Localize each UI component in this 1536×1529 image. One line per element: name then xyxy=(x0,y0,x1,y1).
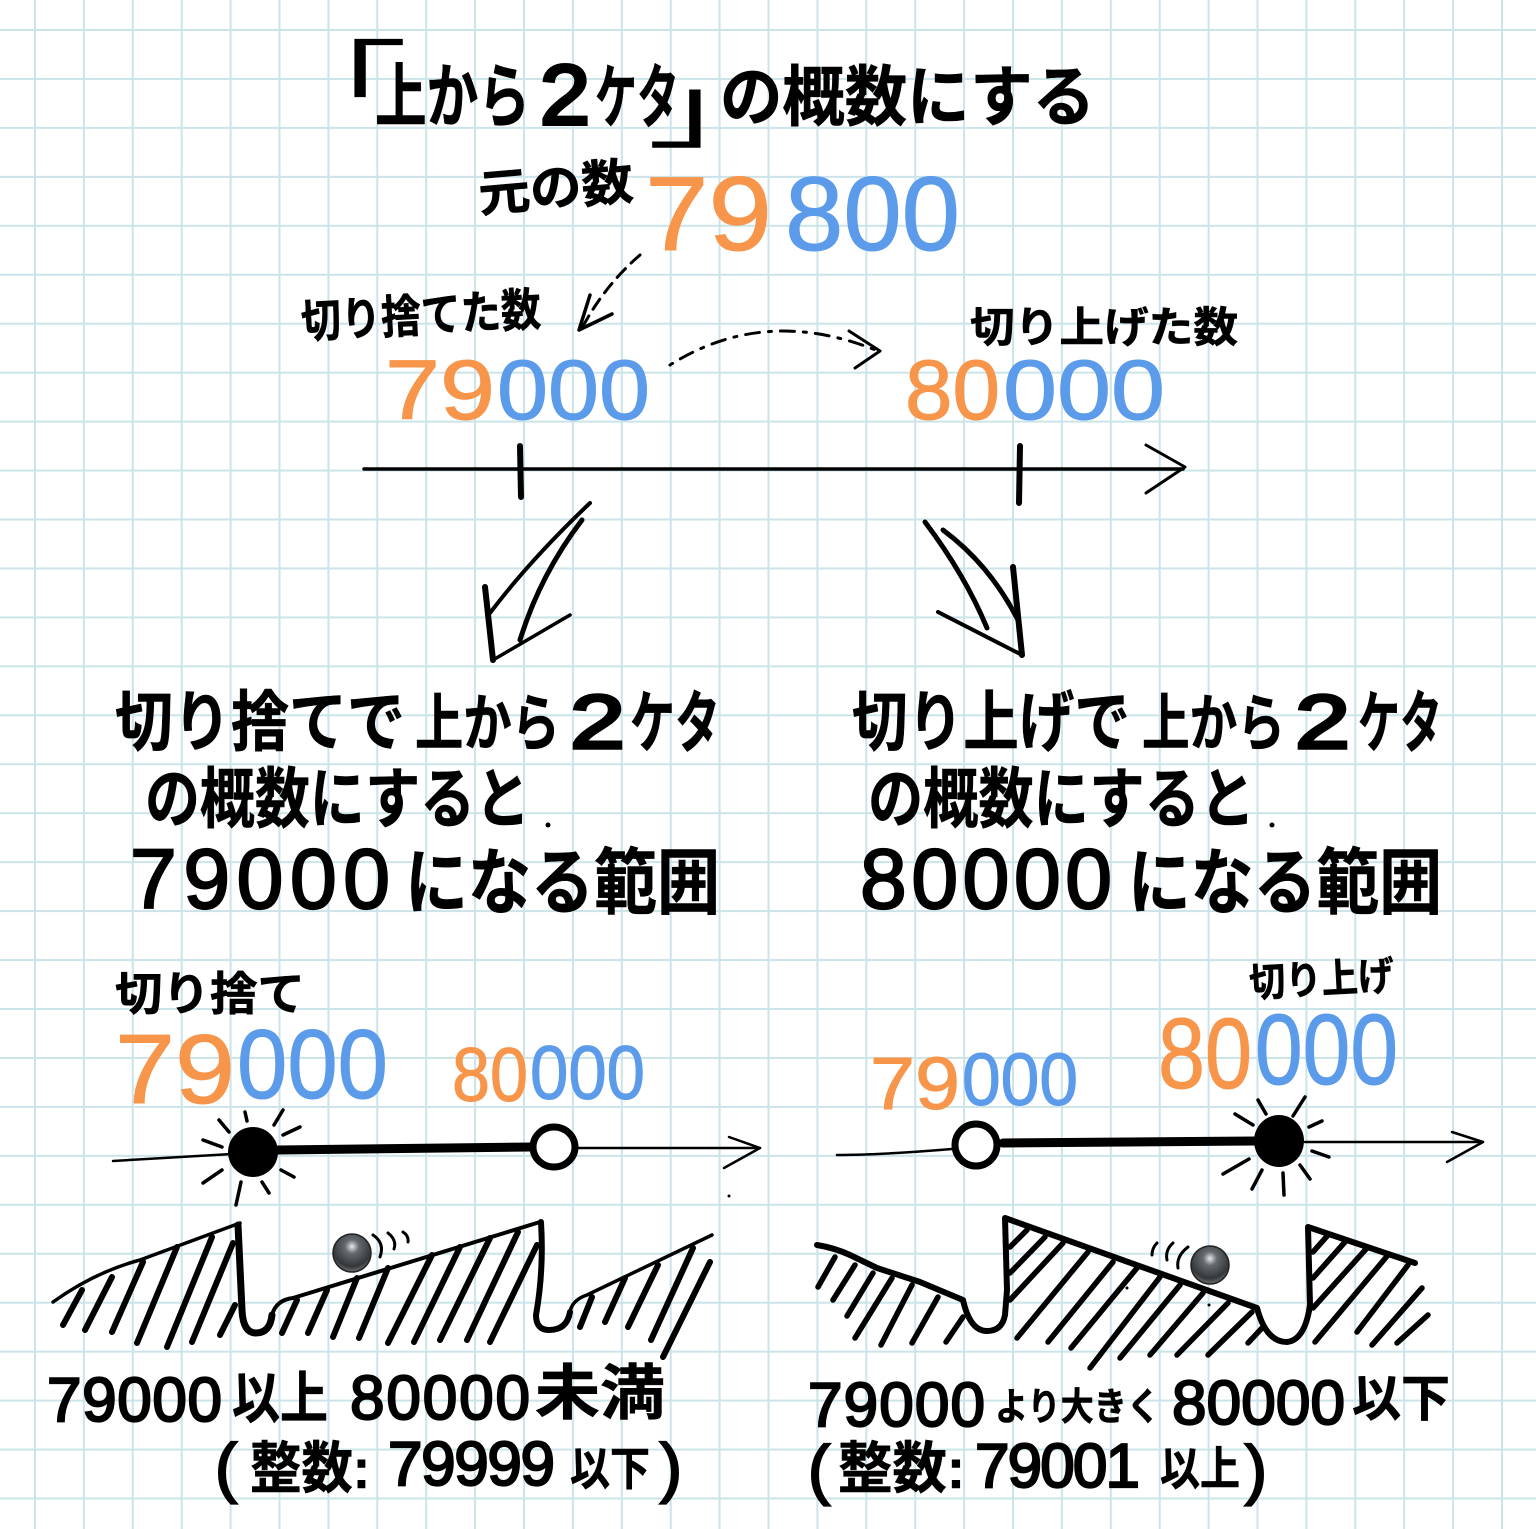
heading: round-up range: ケタ xyxy=(1358,686,1442,762)
caption: round-up range: 79001 xyxy=(975,1432,1140,1501)
number: 80000 small xyxy=(452,1031,645,1118)
heading: round-up range: の概数にすると xyxy=(868,762,1255,836)
number: 80000 small: 000 xyxy=(530,1031,645,1116)
caption: round-down range: 79999 xyxy=(388,1430,555,1499)
caption: round-up range: より大きく xyxy=(995,1387,1160,1429)
number: 79000 rounded down: 79 xyxy=(385,343,495,437)
heading: round-down range: ケタ xyxy=(630,686,720,762)
caption: round-up range xyxy=(808,1369,1450,1506)
number: 79000 emphasized: 000 xyxy=(237,1009,388,1119)
title xyxy=(255,33,1095,159)
caption: round-down range: ) xyxy=(660,1430,682,1504)
arrow: dashed from 79000 to 80000 xyxy=(670,331,880,368)
heading: round-down range: 2 xyxy=(570,680,625,765)
heading: round-up range xyxy=(852,680,1442,926)
slope: hatched ridge, ball rolls down to the closed end xyxy=(53,1222,712,1357)
heading: round-down range: 79000 xyxy=(130,832,390,926)
caption: round-down range: 80000 xyxy=(350,1364,530,1433)
caption: round-down range: 79000 xyxy=(47,1366,222,1435)
heading: round-down range: 切り捨てで xyxy=(115,685,405,759)
title: ケタ xyxy=(595,59,679,137)
caption: round-up range: 整数: xyxy=(838,1437,965,1500)
heading: round-up range: 上から xyxy=(1142,690,1285,759)
arrow: big left xyxy=(485,503,590,660)
heading: round-up range: 80000 xyxy=(860,832,1112,926)
caption: round-down range: 以下 xyxy=(570,1443,650,1495)
number: 79000 small: 79 xyxy=(870,1042,960,1125)
label: round up: 切り上げ xyxy=(1248,954,1395,1006)
caption: round-down range: ( xyxy=(215,1430,237,1504)
heading: round-up range: 切り上げで xyxy=(852,685,1130,759)
number: 80000 rounded up: 000 xyxy=(1003,343,1165,437)
number line: top xyxy=(364,445,1185,503)
heading: round-down range: になる範囲 xyxy=(405,844,720,924)
caption: round-up range: ) xyxy=(1245,1432,1267,1506)
number: 80000 rounded up: 80 xyxy=(905,343,1000,437)
number: 80000 small: 80 xyxy=(452,1033,528,1118)
heading: round-down range: の概数にすると xyxy=(145,762,530,836)
title: 上から xyxy=(375,58,530,136)
number: 79000 small xyxy=(870,1038,1078,1125)
number: 79800 xyxy=(645,156,960,273)
number: 79000 small: 000 xyxy=(962,1038,1078,1121)
caption: round-up range: 以下 xyxy=(1352,1371,1450,1427)
title: 」 xyxy=(647,58,800,159)
caption: round-up range: 80000 xyxy=(1172,1369,1345,1438)
caption: round-down range: 未満 xyxy=(535,1360,665,1427)
title: 「 xyxy=(255,33,408,134)
icon: ball xyxy=(333,1234,371,1272)
label: round down: 切り捨て xyxy=(115,968,305,1020)
label: original number: 元の数 xyxy=(476,154,635,223)
caption: round-down range: 整数: xyxy=(250,1437,370,1500)
heading: round-down range xyxy=(115,680,720,926)
arrow: dashed from original to rounded-down number xyxy=(579,255,640,330)
title: 2 xyxy=(540,48,590,142)
number line: closed to open xyxy=(113,1110,760,1205)
panel: round-up diagram xyxy=(808,954,1483,1506)
number: 79000 emphasized: 79 xyxy=(115,1014,235,1124)
heading: round-up range: になる範囲 xyxy=(1128,844,1442,924)
panel: round-down diagram xyxy=(47,968,760,1504)
caption: round-down range: 以上 xyxy=(232,1367,328,1430)
icon: ball xyxy=(1191,1246,1229,1284)
caption: round-down range xyxy=(47,1360,682,1504)
number: 79000 emphasized xyxy=(115,1009,388,1124)
number: 80000 emphasized xyxy=(1158,994,1398,1110)
number: 80000 emphasized: 80 xyxy=(1158,998,1252,1110)
number: 79800: 79 xyxy=(645,156,772,273)
number: 80000 emphasized: 000 xyxy=(1255,994,1398,1106)
heading: round-down range: 上から xyxy=(415,690,560,759)
caption: round-up range: 79000 xyxy=(808,1371,985,1440)
number: 79000 rounded down: 000 xyxy=(497,343,650,437)
heading: round-up range: 2 xyxy=(1295,680,1350,765)
number: 79000 rounded down xyxy=(385,343,650,437)
number line: open to closed xyxy=(837,1097,1483,1195)
arrow: big right xyxy=(925,522,1022,655)
slope: hatched ridge, ball rolls down to the closed end xyxy=(817,1218,1428,1368)
caption: round-up range: 以上 xyxy=(1160,1443,1240,1495)
caption: round-up range: ( xyxy=(808,1432,830,1506)
label: rounded-down number: 切り捨てた数 xyxy=(300,283,542,348)
number: 79800: 800 xyxy=(785,156,960,273)
number: 80000 rounded up xyxy=(905,343,1165,437)
label: rounded-up number: 切り上げた数 xyxy=(970,304,1238,351)
title: の概数にする xyxy=(720,60,1095,134)
